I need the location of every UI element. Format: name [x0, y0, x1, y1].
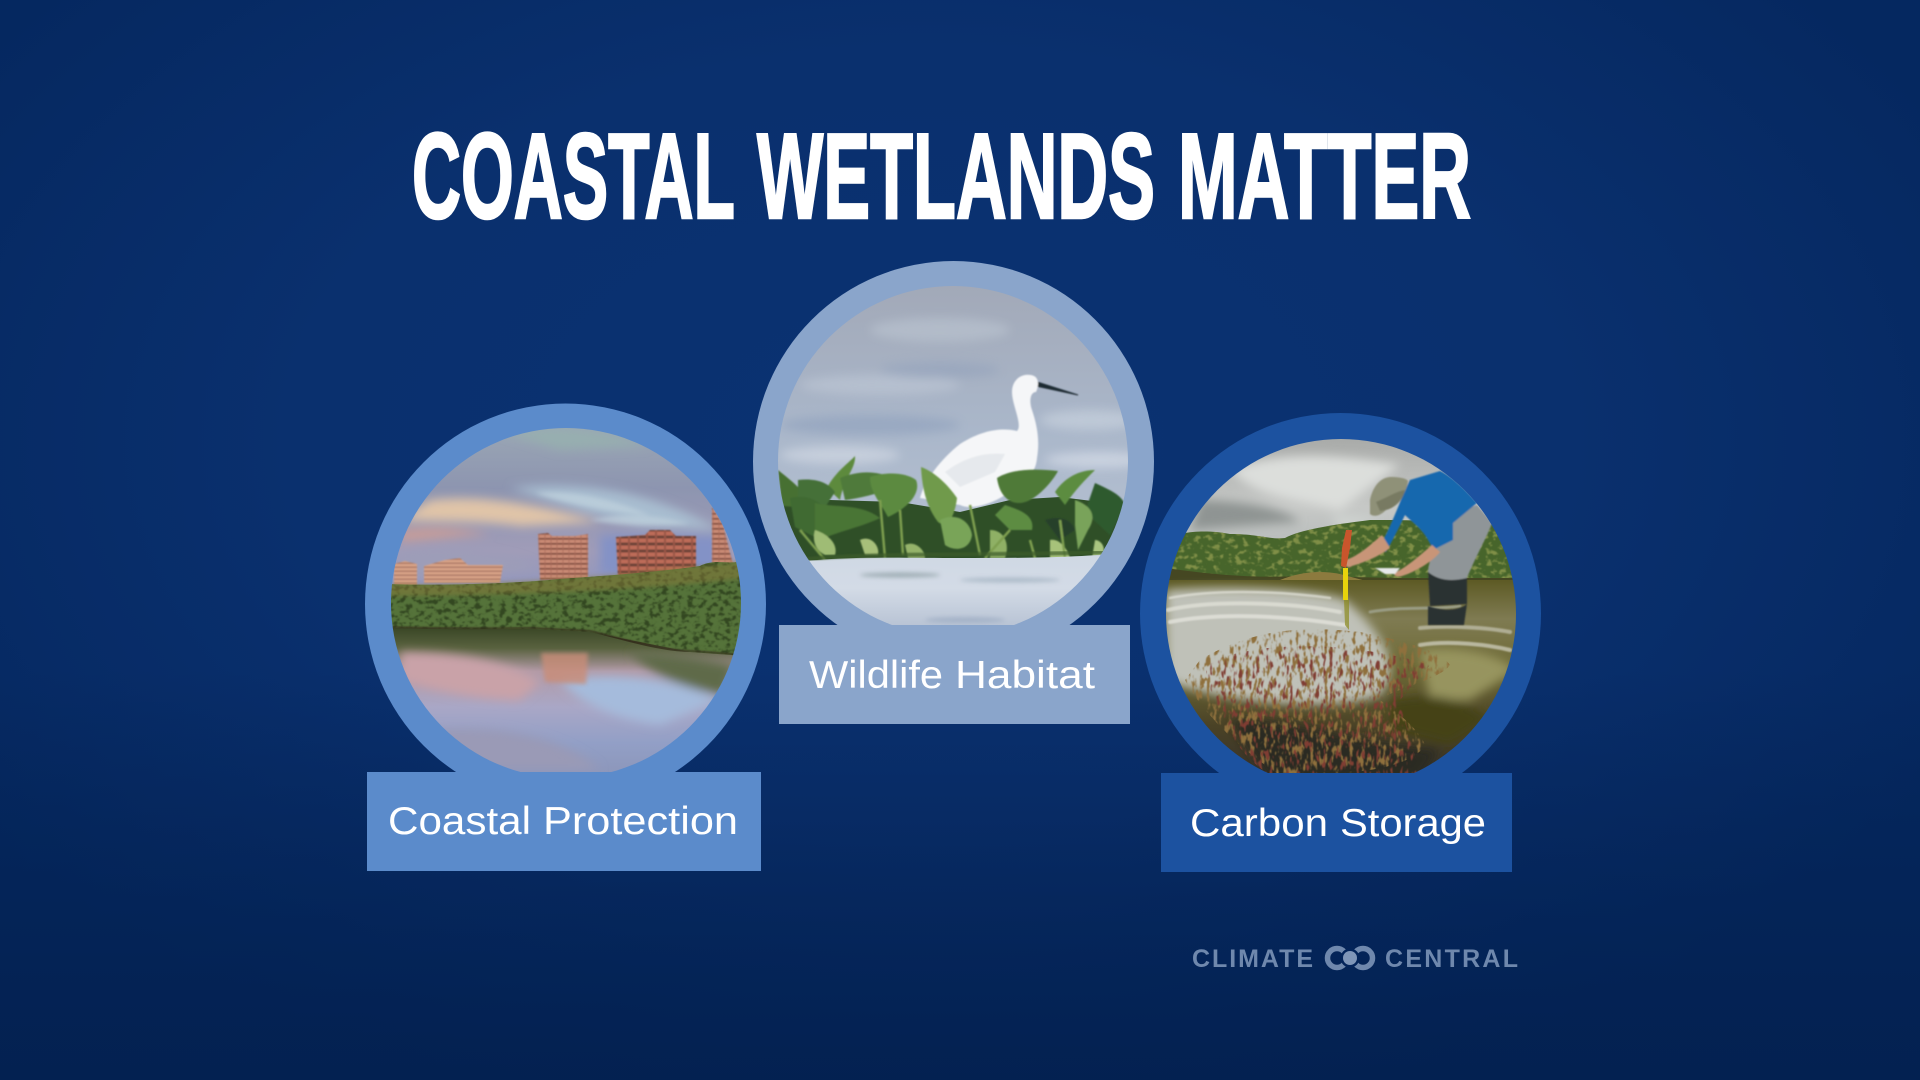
title	[412, 108, 1471, 244]
logo text: central: CENTRAL	[1385, 945, 1518, 973]
panel: coastal protection	[365, 404, 766, 871]
label text: coastal protection: Protection	[543, 800, 738, 843]
trees	[1172, 520, 1512, 578]
water	[385, 628, 745, 772]
label text: wildlife habitat	[809, 654, 1095, 697]
buildings	[394, 507, 737, 586]
measuring stake	[1341, 530, 1352, 630]
panel: carbon storage	[1140, 413, 1541, 872]
ring: wildlife habitat	[753, 261, 1154, 662]
label text: carbon storage: Carbon	[1190, 802, 1328, 845]
label text: carbon storage	[1190, 802, 1486, 845]
label text: coastal protection	[388, 800, 738, 843]
photo: white egret among water hyacinth	[778, 286, 1155, 625]
label bar: coastal protection	[367, 772, 761, 871]
label text: wildlife habitat: Habitat	[955, 654, 1095, 697]
water hyacinth leaves	[778, 497, 1128, 560]
scientist	[1345, 471, 1492, 625]
logo text: climate: CLIMATE	[1192, 945, 1313, 973]
label text: coastal protection: Coastal	[388, 800, 531, 843]
title: COASTAL	[412, 108, 735, 244]
title: MATTER	[1178, 108, 1471, 244]
label text: wildlife habitat: Wildlife	[809, 654, 943, 697]
egret	[920, 375, 1078, 507]
photo: scientist measuring water level in a marsh	[1166, 439, 1520, 780]
panel: wildlife habitat	[753, 261, 1155, 724]
photo: mangrove shore with high-rise buildings at sunset	[385, 428, 745, 772]
ring: carbon storage	[1140, 413, 1541, 814]
marsh plants	[1185, 629, 1450, 775]
title: WETLANDS	[757, 108, 1155, 244]
ring: coastal protection	[365, 404, 766, 804]
label text: carbon storage: Storage	[1340, 802, 1486, 845]
label bar: carbon storage	[1161, 773, 1512, 872]
logo: Climate Central	[1192, 945, 1518, 973]
logo icon: linked rings	[1328, 948, 1372, 968]
water	[810, 554, 1101, 625]
label bar: wildlife habitat	[779, 625, 1130, 724]
water	[1166, 580, 1516, 775]
mangrove trees	[385, 560, 745, 656]
